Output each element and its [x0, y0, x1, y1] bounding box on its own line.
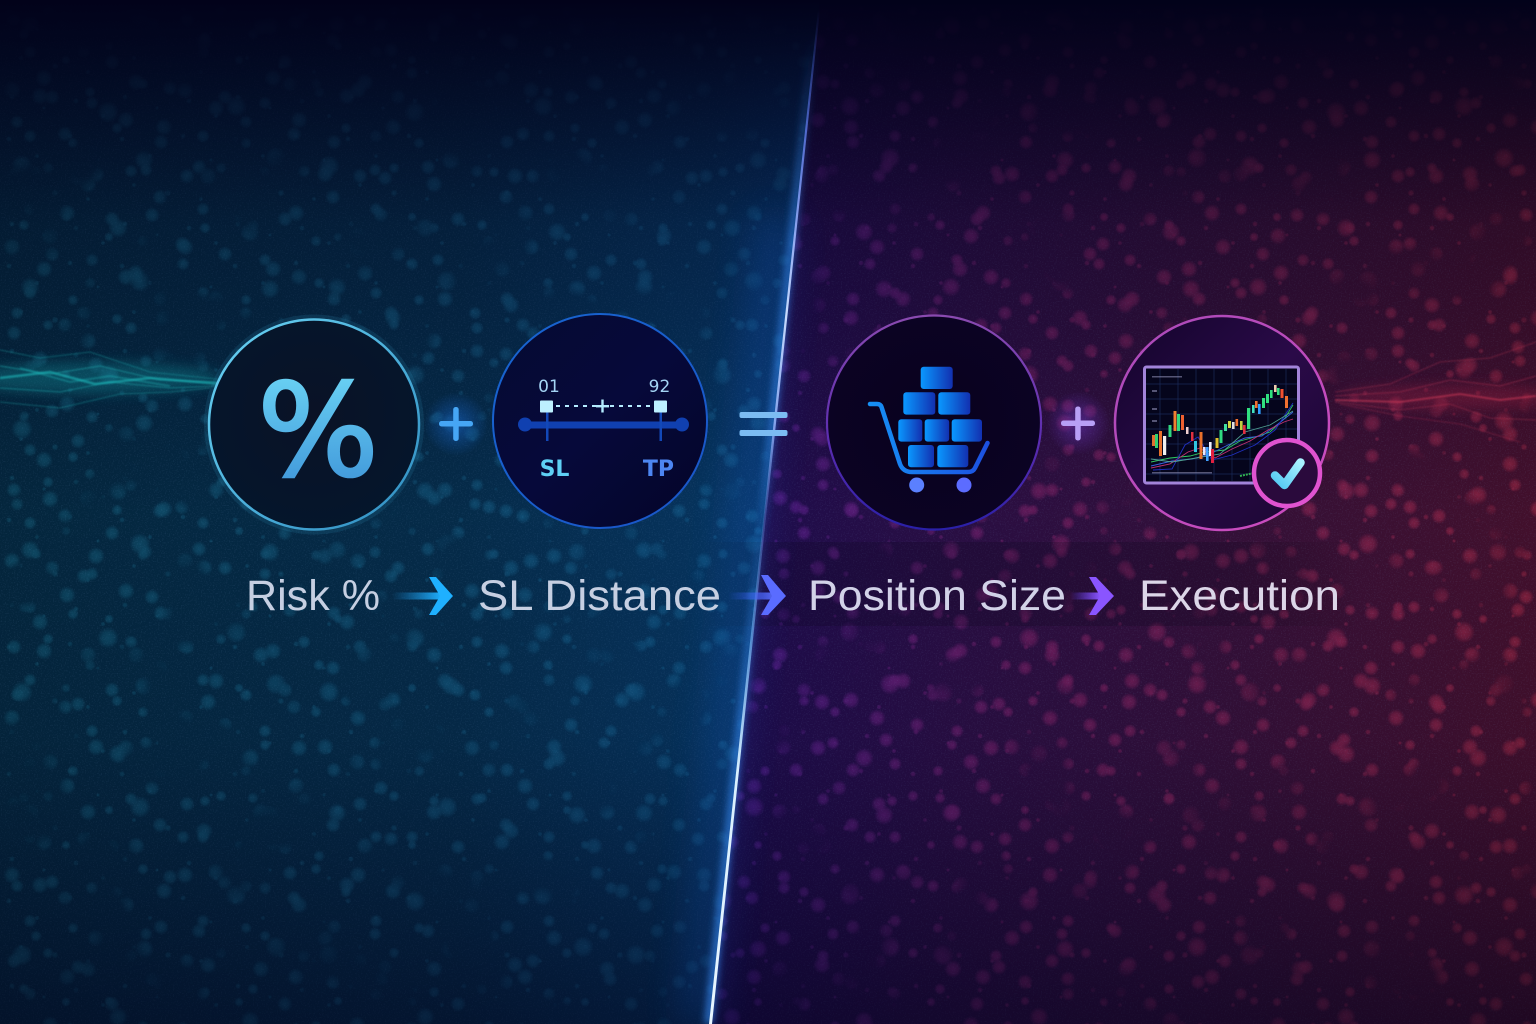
- arrow: position size to execution: [1070, 577, 1114, 615]
- equals sign: [740, 412, 788, 436]
- label: SL: SL: [540, 457, 569, 482]
- light streaks: right red: [1335, 342, 1536, 442]
- icon: check badge: [1254, 440, 1320, 506]
- label: Risk %: Risk %: [246, 572, 380, 620]
- label: 01: 01: [538, 377, 560, 397]
- bokeh particles: left: [4, 80, 788, 1024]
- chart: candlesticks: [1152, 385, 1288, 463]
- divider line: [709, 10, 820, 1024]
- icon: cart of blocks: [870, 367, 988, 492]
- label: Execution: Execution: [1139, 572, 1340, 620]
- streak glow: right: [1340, 385, 1536, 409]
- divider glow: [682, 220, 790, 1024]
- label: Position Size: Position Size: [808, 572, 1066, 620]
- chart: volume strip: [1240, 473, 1254, 476]
- step 1: risk percent circle: [206, 316, 422, 532]
- divider soft halo: [705, 40, 816, 1024]
- plus: blue: [424, 392, 488, 456]
- icon: SL TP range bar: [518, 400, 689, 441]
- icon: trading chart screen: [1144, 367, 1298, 483]
- faint label band: [700, 542, 1360, 626]
- arrow: risk to SL distance: [392, 577, 453, 615]
- light streaks: left teal: [0, 350, 225, 408]
- background: purple-red right half: [700, 0, 1536, 1024]
- plus: purple: [1046, 391, 1110, 455]
- chart: moving average lines: [1151, 403, 1293, 470]
- step 4: execution circle: [1115, 316, 1329, 530]
- streak glow: left: [0, 362, 220, 394]
- bokeh particles: right: [700, 0, 1536, 1024]
- step 3: position size circle: [827, 316, 1041, 530]
- label: 92: 92: [649, 377, 670, 397]
- label: TP: TP: [643, 457, 674, 482]
- icon: percent sign: %: [257, 357, 379, 506]
- label: SL Distance: SL Distance: [478, 572, 721, 620]
- step 2: stop-loss distance circle: [493, 314, 707, 528]
- arrow: SL distance to position size: [728, 575, 786, 615]
- background: blue left half: [0, 0, 830, 1024]
